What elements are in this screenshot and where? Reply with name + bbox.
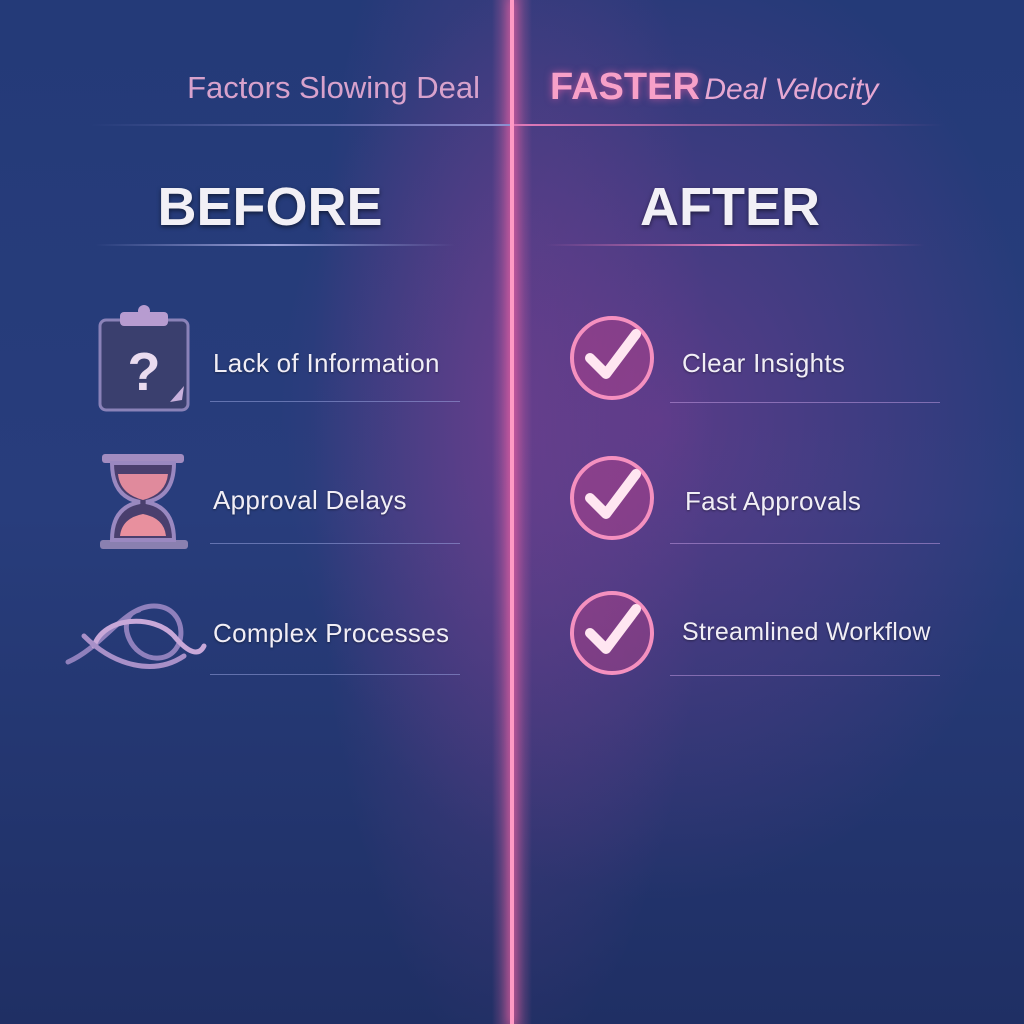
text: Clear Insights: Clear Insights bbox=[682, 348, 845, 378]
panel: before items bbox=[66, 305, 460, 675]
icon: clipboard question: ? bbox=[128, 342, 160, 402]
heading: BEFORE: BEFORE bbox=[157, 177, 383, 237]
heading left: Factors Slowing Deal: Factors Slowing Deal bbox=[187, 70, 480, 105]
text: Complex Processes: Complex Processes bbox=[213, 618, 449, 648]
icon: hourglass bbox=[100, 454, 188, 549]
center glow line bbox=[492, 0, 532, 1024]
text: Fast Approvals: Fast Approvals bbox=[685, 486, 861, 516]
text: Approval Delays: Approval Delays bbox=[213, 485, 407, 515]
icon: check 3 bbox=[570, 591, 654, 675]
heading: AFTER: AFTER bbox=[640, 177, 820, 237]
text: Lack of Information: Lack of Information bbox=[213, 348, 440, 378]
heading right: FASTER Deal Velocity: FASTER Deal Velocity bbox=[550, 66, 878, 108]
icon: check 1 bbox=[570, 316, 654, 400]
text: Streamlined Workflow: Streamlined Workflow bbox=[682, 618, 931, 646]
panel: after items bbox=[570, 316, 940, 676]
icon: check 2 bbox=[570, 456, 654, 540]
icon: tangled knot bbox=[66, 604, 206, 669]
icon: clipboard question bbox=[98, 305, 190, 412]
